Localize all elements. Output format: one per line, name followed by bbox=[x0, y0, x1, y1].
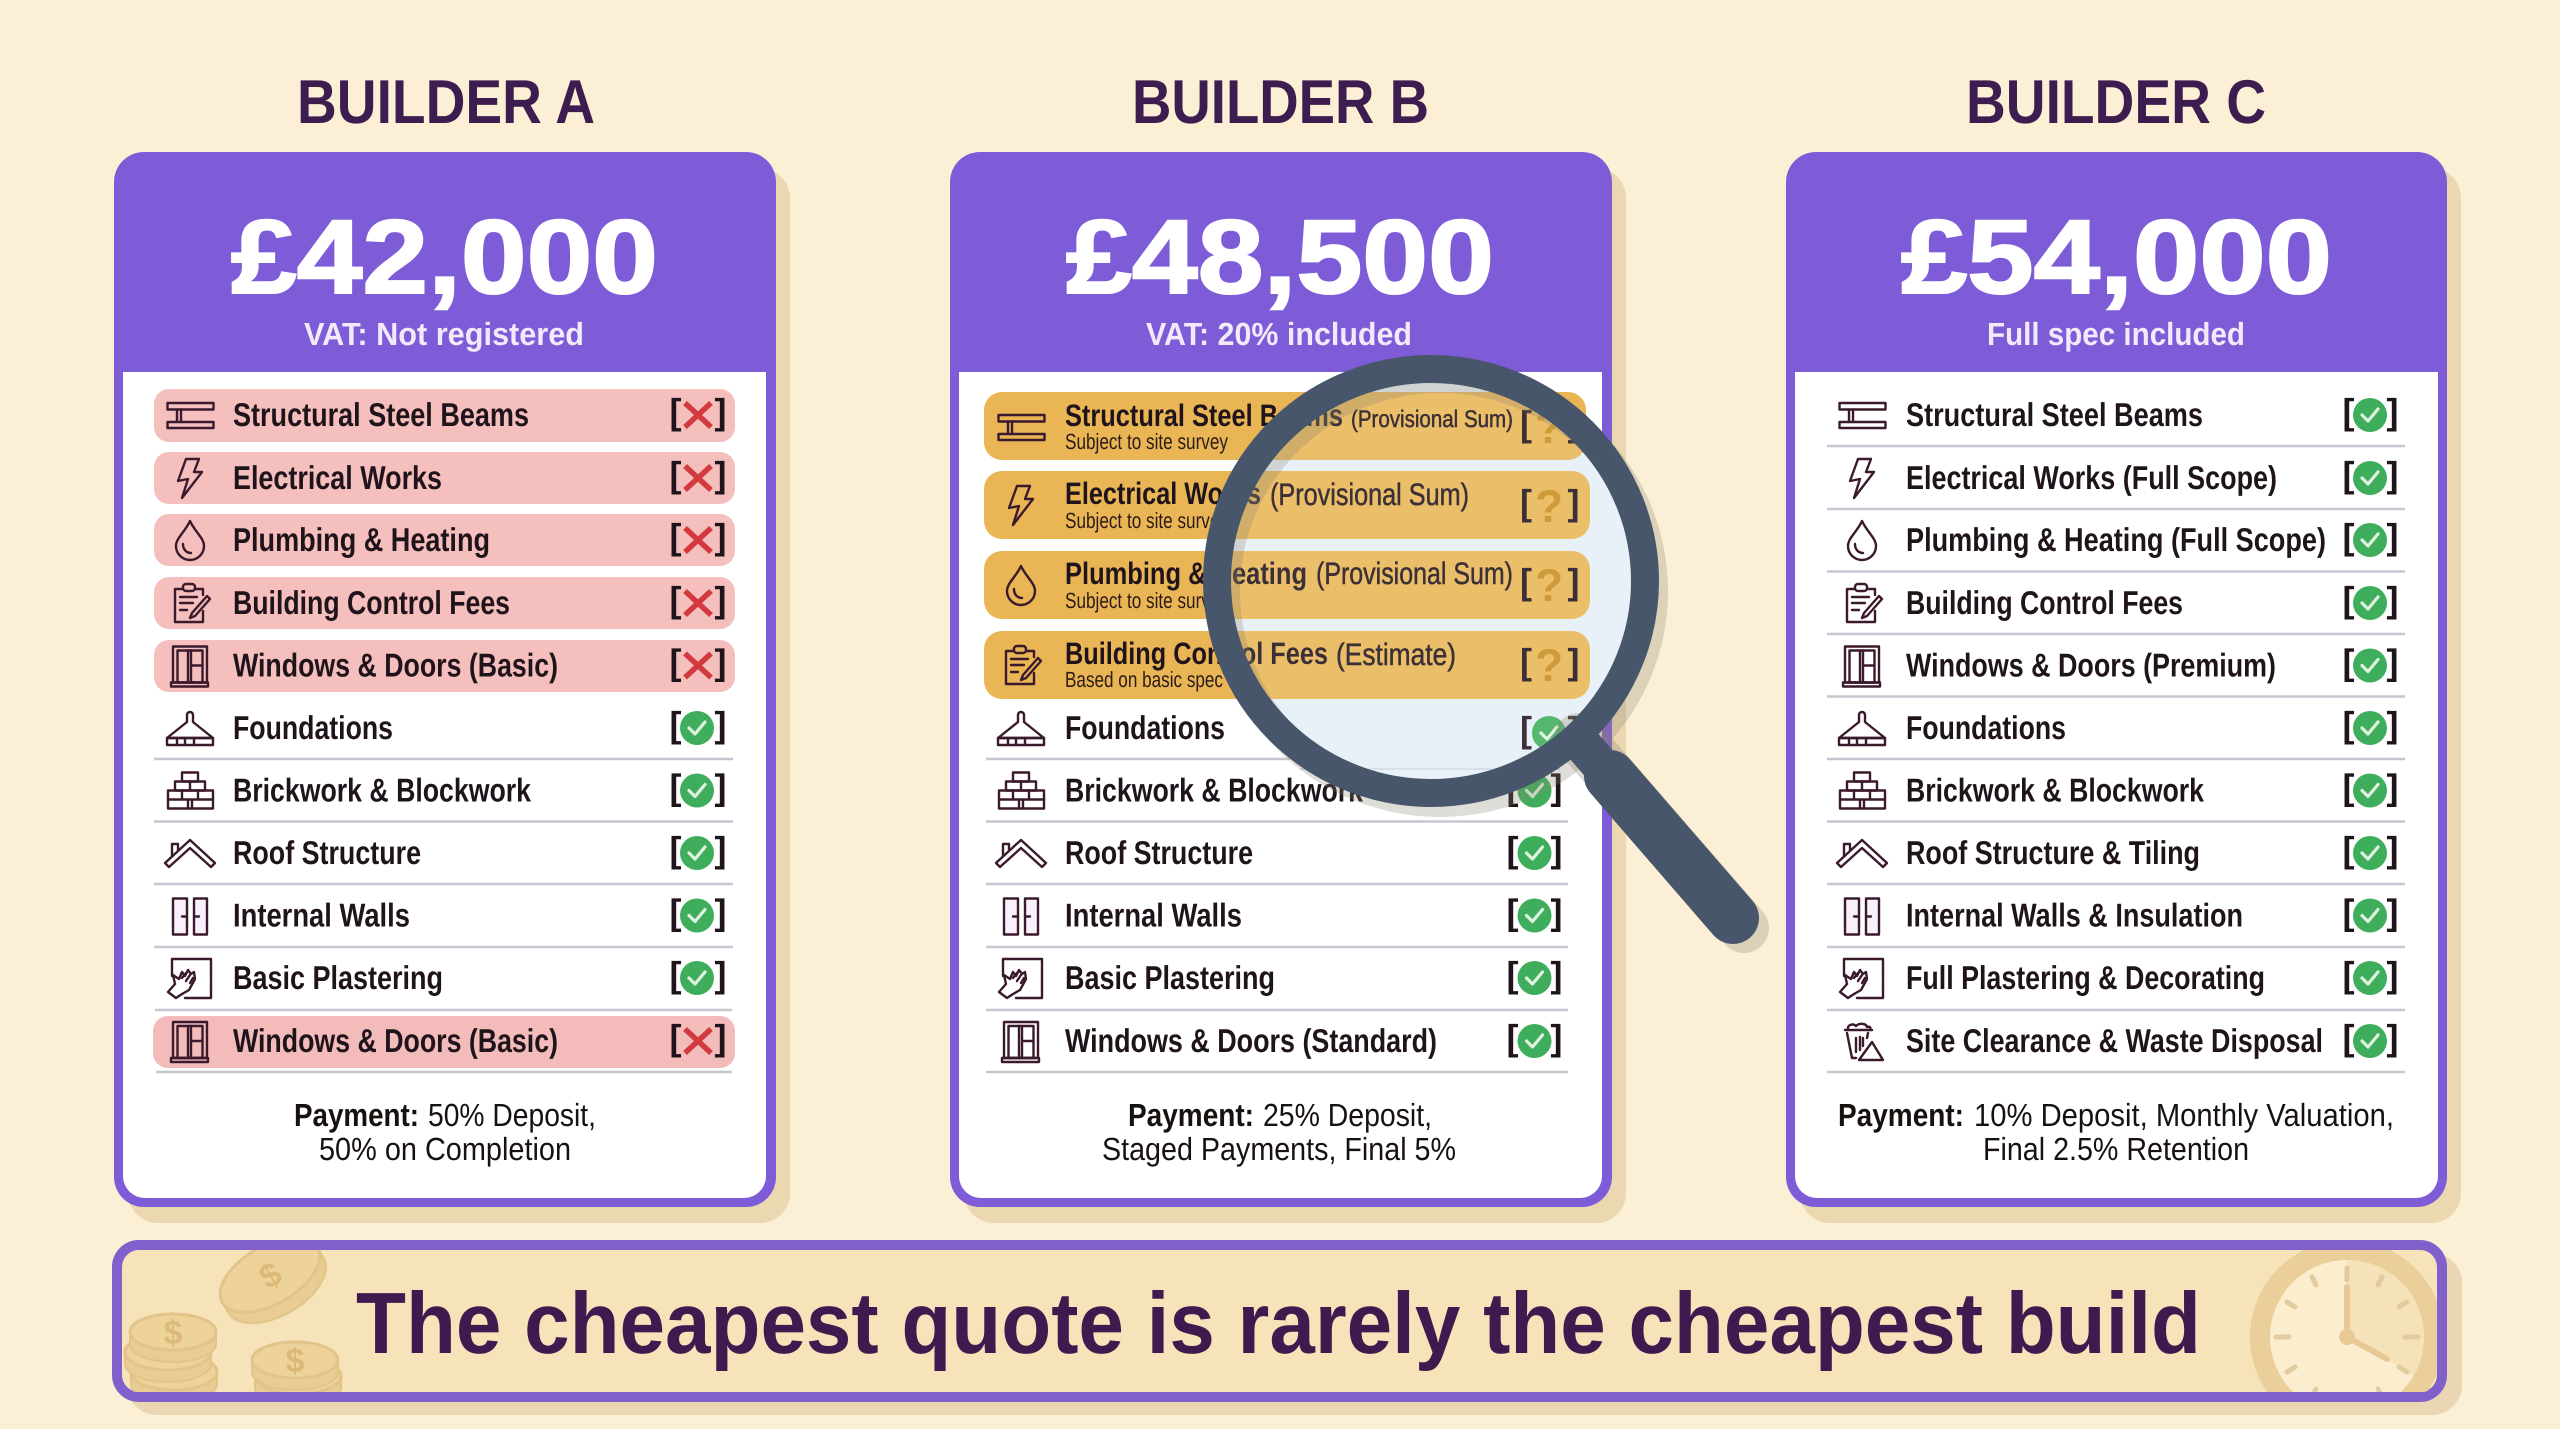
row: Building Control Fees, missing: [ bbox=[670, 579, 682, 620]
price: Builder C: £54,000 bbox=[1901, 199, 2332, 316]
row: Foundations, included: [ bbox=[670, 704, 682, 745]
row: Structural Steel Beams, provisional sum: ? bbox=[1535, 401, 1563, 453]
row: Roof Structure and Tiling, included: [ bbox=[2342, 829, 2354, 870]
row: Windows and Doors Basic, missing bbox=[154, 640, 735, 692]
row: Basic Plastering, included: ] bbox=[714, 954, 726, 995]
row: Plumbing and Heating Full Scope, included bbox=[1827, 516, 2405, 572]
row: Foundations, included: Foundations bbox=[1906, 709, 2066, 746]
heading: Builder C: BUILDER C bbox=[1966, 68, 2266, 137]
row: Foundations, included bbox=[986, 709, 1580, 769]
icon: coins: $ bbox=[164, 1314, 183, 1352]
row: Basic Plastering, included: [ bbox=[1506, 954, 1518, 995]
row: Windows and Doors Basic repeat, missing: [ bbox=[670, 1017, 682, 1058]
row: Structural Steel Beams, included bbox=[1827, 391, 2405, 446]
icon: coins bbox=[124, 1250, 342, 1392]
row: Building Control Fees, estimate: [ bbox=[1520, 641, 1532, 682]
row: Windows and Doors Basic repeat, missing: ] bbox=[714, 1017, 726, 1058]
row: Building Control Fees, included: [ bbox=[2342, 579, 2354, 620]
row: Internal Walls, included: Internal Walls bbox=[233, 896, 410, 934]
VAT note: Builder C: Full spec included bbox=[1987, 316, 2245, 352]
row: Building Control Fees, estimate: ? bbox=[1535, 639, 1563, 691]
row: Roof Structure, included bbox=[986, 829, 1568, 884]
row: Brickwork and Blockwork, included: [ bbox=[1506, 766, 1518, 808]
row: Brickwork and Blockwork, included: ] bbox=[714, 766, 726, 808]
row: Basic Plastering, included bbox=[155, 954, 732, 1010]
payment terms: Builder A: 50% on Completion bbox=[319, 1131, 571, 1167]
panel: Builder A card bbox=[114, 152, 790, 1223]
row: Roof Structure, included: [ bbox=[670, 829, 682, 870]
row: Basic Plastering, included: Basic Plastering bbox=[233, 959, 443, 996]
row: Brickwork and Blockwork, included bbox=[154, 766, 733, 822]
icon: clock bbox=[2250, 1250, 2437, 1392]
row: Structural Steel Beams, provisional sum: Structural Steel Beams bbox=[1065, 398, 1343, 433]
row: Foundations, included: Foundations bbox=[1065, 709, 1225, 746]
row: Internal Walls and Insulation, included: ] bbox=[2386, 892, 2398, 932]
headline: The cheapest quote is rarely the cheapest build bbox=[356, 1275, 2201, 1372]
row: Plumbing and Heating Full Scope, included: ] bbox=[2386, 516, 2398, 557]
row: Building Control Fees, estimate: Building Control Fees bbox=[1065, 636, 1328, 671]
payment terms: Builder A bbox=[294, 1097, 596, 1167]
icon: coins: $ bbox=[253, 1255, 288, 1297]
row: Windows and Doors Basic repeat, missing: Windows & Doors (Basic) bbox=[233, 1022, 558, 1059]
row: Foundations, included: ] bbox=[2386, 704, 2398, 745]
payment terms: Builder A: 50% Deposit, bbox=[428, 1097, 596, 1133]
row: Electrical Works Full Scope, included: ] bbox=[2386, 454, 2398, 495]
row: Roof Structure, included: [ bbox=[1506, 829, 1518, 870]
payment terms: Builder B bbox=[1102, 1097, 1456, 1167]
row: Basic Plastering, included bbox=[986, 954, 1568, 1010]
row: Brickwork and Blockwork, included: ] bbox=[1550, 766, 1562, 808]
panel: Builder B card bbox=[950, 152, 1636, 1223]
row: Electrical Works, missing: ] bbox=[714, 454, 726, 495]
row: Building Control Fees, estimate bbox=[984, 631, 1590, 699]
row: Windows and Doors Standard, included: Windows & Doors (Standard) bbox=[1065, 1022, 1437, 1059]
row: Plumbing and Heating, provisional sum: ] bbox=[1568, 561, 1580, 602]
row: Brickwork and Blockwork, included: ] bbox=[2386, 766, 2398, 808]
payment terms: Builder B: 25% Deposit, bbox=[1263, 1097, 1432, 1133]
row: Building Control Fees, estimate: ] bbox=[1568, 641, 1580, 682]
row: Structural Steel Beams, missing: Structural Steel Beams bbox=[233, 396, 529, 433]
row: Electrical Works, missing bbox=[154, 452, 735, 504]
row: Brickwork and Blockwork, included: Brickwork & Blockwork bbox=[1065, 772, 1364, 808]
row: Roof Structure and Tiling, included bbox=[1827, 829, 2405, 884]
row: Building Control Fees, included: Building Control Fees bbox=[1906, 584, 2183, 621]
row: Electrical Works, provisional sum: ? bbox=[1535, 480, 1563, 532]
payment terms: Builder C: Final 2.5% Retention bbox=[1983, 1131, 2249, 1167]
row: Internal Walls, included: ] bbox=[714, 892, 726, 932]
row: Windows and Doors Premium, included: [ bbox=[2342, 642, 2354, 682]
row: Structural Steel Beams, provisional sum: (Provisional Sum) bbox=[1351, 406, 1513, 433]
row: Foundations, included: ] bbox=[714, 704, 726, 745]
row: Building Control Fees, missing bbox=[154, 577, 735, 629]
row: Plumbing and Heating, provisional sum bbox=[984, 551, 1590, 619]
row: Full Plastering and Decorating, included: [ bbox=[2342, 954, 2354, 995]
row: Roof Structure and Tiling, included: ] bbox=[2386, 829, 2398, 870]
row: Internal Walls, included: [ bbox=[670, 892, 682, 932]
heading: Builder A: BUILDER A bbox=[297, 68, 595, 137]
row: Electrical Works Full Scope, included: [ bbox=[2342, 454, 2354, 495]
row: Structural Steel Beams, provisional sum: ] bbox=[1568, 403, 1580, 444]
row: Electrical Works, provisional sum: [ bbox=[1520, 482, 1532, 523]
row: Structural Steel Beams, provisional sum bbox=[984, 392, 1586, 460]
row: Electrical Works Full Scope, included bbox=[1827, 454, 2405, 509]
row: Internal Walls and Insulation, included: [ bbox=[2342, 892, 2354, 932]
row: Electrical Works, missing: Electrical Works bbox=[233, 459, 442, 496]
payment terms: Builder C: Payment: bbox=[1838, 1097, 1964, 1133]
row: Full Plastering and Decorating, included: ] bbox=[2386, 954, 2398, 995]
row: Windows and Doors Standard, included: ] bbox=[1550, 1017, 1562, 1058]
row: Site Clearance and Waste Disposal, included: [ bbox=[2342, 1017, 2354, 1058]
row: Roof Structure, included: Roof Structure bbox=[1065, 834, 1253, 871]
row: Plumbing and Heating Full Scope, included: Plumbing & Heating (Full Scope) bbox=[1906, 521, 2326, 558]
row: Windows and Doors Premium, included bbox=[1827, 642, 2405, 696]
icon: magnifying glass bbox=[1217, 369, 1744, 928]
row: Electrical Works, provisional sum: (Provisional Sum) bbox=[1270, 477, 1469, 512]
row: Structural Steel Beams, included: ] bbox=[2386, 391, 2398, 432]
row: Electrical Works, provisional sum: Electrical Works bbox=[1065, 476, 1261, 511]
row: Site Clearance and Waste Disposal, included: Site Clearance & Waste Disposal bbox=[1906, 1022, 2323, 1059]
VAT note: Builder B: VAT: 20% included bbox=[1146, 316, 1412, 352]
row: Windows and Doors Basic repeat, missing bbox=[153, 1016, 735, 1072]
row: Windows and Doors Basic, missing: [ bbox=[670, 642, 682, 682]
row: Basic Plastering, included: [ bbox=[670, 954, 682, 995]
row: Brickwork and Blockwork, included: [ bbox=[670, 766, 682, 808]
row: Foundations, included bbox=[1827, 704, 2405, 759]
row: Foundations, included: [ bbox=[2342, 704, 2354, 745]
row: Structural Steel Beams, missing: [ bbox=[670, 391, 682, 432]
row: Electrical Works Full Scope, included: Electrical Works (Full Scope) bbox=[1906, 459, 2277, 496]
payment terms: Builder B: Staged Payments, Final 5% bbox=[1102, 1131, 1456, 1167]
VAT note: Builder A: VAT: Not registered bbox=[304, 316, 584, 352]
row: Full Plastering and Decorating, included: Full Plastering & Decorating bbox=[1906, 959, 2265, 996]
row: Foundations, included: ] bbox=[1568, 709, 1580, 750]
row: Internal Walls and Insulation, included: Internal Walls & Insulation bbox=[1906, 896, 2243, 934]
heading: Builder B: BUILDER B bbox=[1132, 68, 1429, 137]
row: Structural Steel Beams, missing bbox=[154, 389, 735, 442]
row: Plumbing and Heating, missing: [ bbox=[670, 516, 682, 557]
row: Electrical Works, provisional sum: ] bbox=[1568, 482, 1580, 523]
row: Building Control Fees, missing: ] bbox=[714, 579, 726, 620]
row: Structural Steel Beams, missing: ] bbox=[714, 391, 726, 432]
row: Structural Steel Beams, included: [ bbox=[2342, 391, 2354, 432]
row: Brickwork and Blockwork, included: [ bbox=[2342, 766, 2354, 808]
magnifier lens glass bbox=[1226, 376, 1636, 786]
row: Windows and Doors Basic, missing: ] bbox=[714, 642, 726, 682]
row: Structural Steel Beams, provisional sum: Subject to site survey bbox=[1065, 429, 1228, 454]
payment terms: Builder A: Payment: bbox=[294, 1097, 419, 1133]
row: Plumbing and Heating Full Scope, included: [ bbox=[2342, 516, 2354, 557]
row: Plumbing and Heating, provisional sum: ? bbox=[1535, 559, 1563, 611]
row: Brickwork and Blockwork, included: Brickwork & Blockwork bbox=[1906, 772, 2205, 808]
row: Building Control Fees, missing: Building Control Fees bbox=[233, 584, 510, 621]
row: Roof Structure, included: Roof Structure bbox=[233, 834, 421, 871]
row: Plumbing and Heating, provisional sum: Subject to site survey bbox=[1065, 588, 1228, 613]
row: Roof Structure, included bbox=[154, 829, 733, 884]
callout banner bbox=[112, 1240, 2462, 1415]
row: Electrical Works, missing: [ bbox=[670, 454, 682, 495]
icon: coins: $ bbox=[286, 1342, 305, 1380]
panel: Builder C card bbox=[1786, 152, 2461, 1223]
row: Internal Walls, included bbox=[154, 892, 733, 947]
row: Plumbing and Heating, missing bbox=[154, 514, 735, 566]
row: Plumbing and Heating, provisional sum: (Provisional Sum) bbox=[1316, 556, 1513, 591]
row: Roof Structure, included: ] bbox=[714, 829, 726, 870]
row: Basic Plastering, included: ] bbox=[1550, 954, 1562, 995]
price: Builder B: £48,500 bbox=[1066, 199, 1494, 316]
row: Site Clearance and Waste Disposal, included bbox=[1827, 1017, 2405, 1072]
row: Structural Steel Beams, provisional sum: [ bbox=[1520, 403, 1532, 444]
row: Internal Walls, included: [ bbox=[1506, 892, 1518, 932]
row: Foundations, included: [ bbox=[1520, 709, 1532, 750]
row: Windows and Doors Standard, included: [ bbox=[1506, 1017, 1518, 1058]
row: Electrical Works, provisional sum bbox=[984, 471, 1590, 539]
row: Building Control Fees, estimate: Based on basic spec bbox=[1065, 667, 1223, 692]
price: Builder A: £42,000 bbox=[231, 199, 658, 316]
row: Electrical Works, provisional sum: Subject to site survey bbox=[1065, 508, 1228, 533]
row: Building Control Fees, included bbox=[1827, 579, 2405, 634]
payment terms: Builder C: 10% Deposit, Monthly Valuation, bbox=[1974, 1097, 2394, 1133]
payment terms: Builder C bbox=[1838, 1097, 2394, 1167]
payment terms: Builder B: Payment: bbox=[1128, 1097, 1254, 1133]
row: Plumbing and Heating, missing: Plumbing & Heating bbox=[233, 521, 490, 558]
row: Plumbing and Heating, provisional sum: Plumbing & Heating bbox=[1065, 556, 1307, 591]
row: Internal Walls, included bbox=[986, 892, 1568, 947]
row: Site Clearance and Waste Disposal, included: ] bbox=[2386, 1017, 2398, 1058]
row: Windows and Doors Basic, missing: Windows & Doors (Basic) bbox=[233, 646, 558, 684]
row: Internal Walls and Insulation, included bbox=[1827, 892, 2405, 947]
row: Structural Steel Beams, included: Structural Steel Beams bbox=[1906, 396, 2203, 433]
row: Plumbing and Heating, missing: ] bbox=[714, 516, 726, 557]
row: Full Plastering and Decorating, included bbox=[1827, 954, 2405, 1010]
row: Brickwork and Blockwork, included: Brickwork & Blockwork bbox=[233, 772, 532, 808]
row: Windows and Doors Premium, included: ] bbox=[2386, 642, 2398, 682]
row: Basic Plastering, included: Basic Plastering bbox=[1065, 959, 1275, 996]
row: Building Control Fees, included: ] bbox=[2386, 579, 2398, 620]
row: Foundations, included: Foundations bbox=[233, 709, 393, 746]
row: Plumbing and Heating, provisional sum: [ bbox=[1520, 561, 1532, 602]
row: Foundations, included bbox=[154, 704, 733, 759]
row: Roof Structure, included: ] bbox=[1550, 829, 1562, 870]
row: Brickwork and Blockwork, included bbox=[986, 766, 1568, 822]
row: Roof Structure and Tiling, included: Roof Structure & Tiling bbox=[1906, 834, 2200, 871]
row: Windows and Doors Premium, included: Windows & Doors (Premium) bbox=[1906, 646, 2276, 684]
row: Brickwork and Blockwork, included bbox=[1827, 766, 2405, 822]
row: Internal Walls, included: ] bbox=[1550, 892, 1562, 932]
row: Internal Walls, included: Internal Walls bbox=[1065, 896, 1242, 934]
row: Building Control Fees, estimate: (Estimate) bbox=[1336, 637, 1456, 672]
row: Windows and Doors Standard, included bbox=[986, 1017, 1568, 1072]
